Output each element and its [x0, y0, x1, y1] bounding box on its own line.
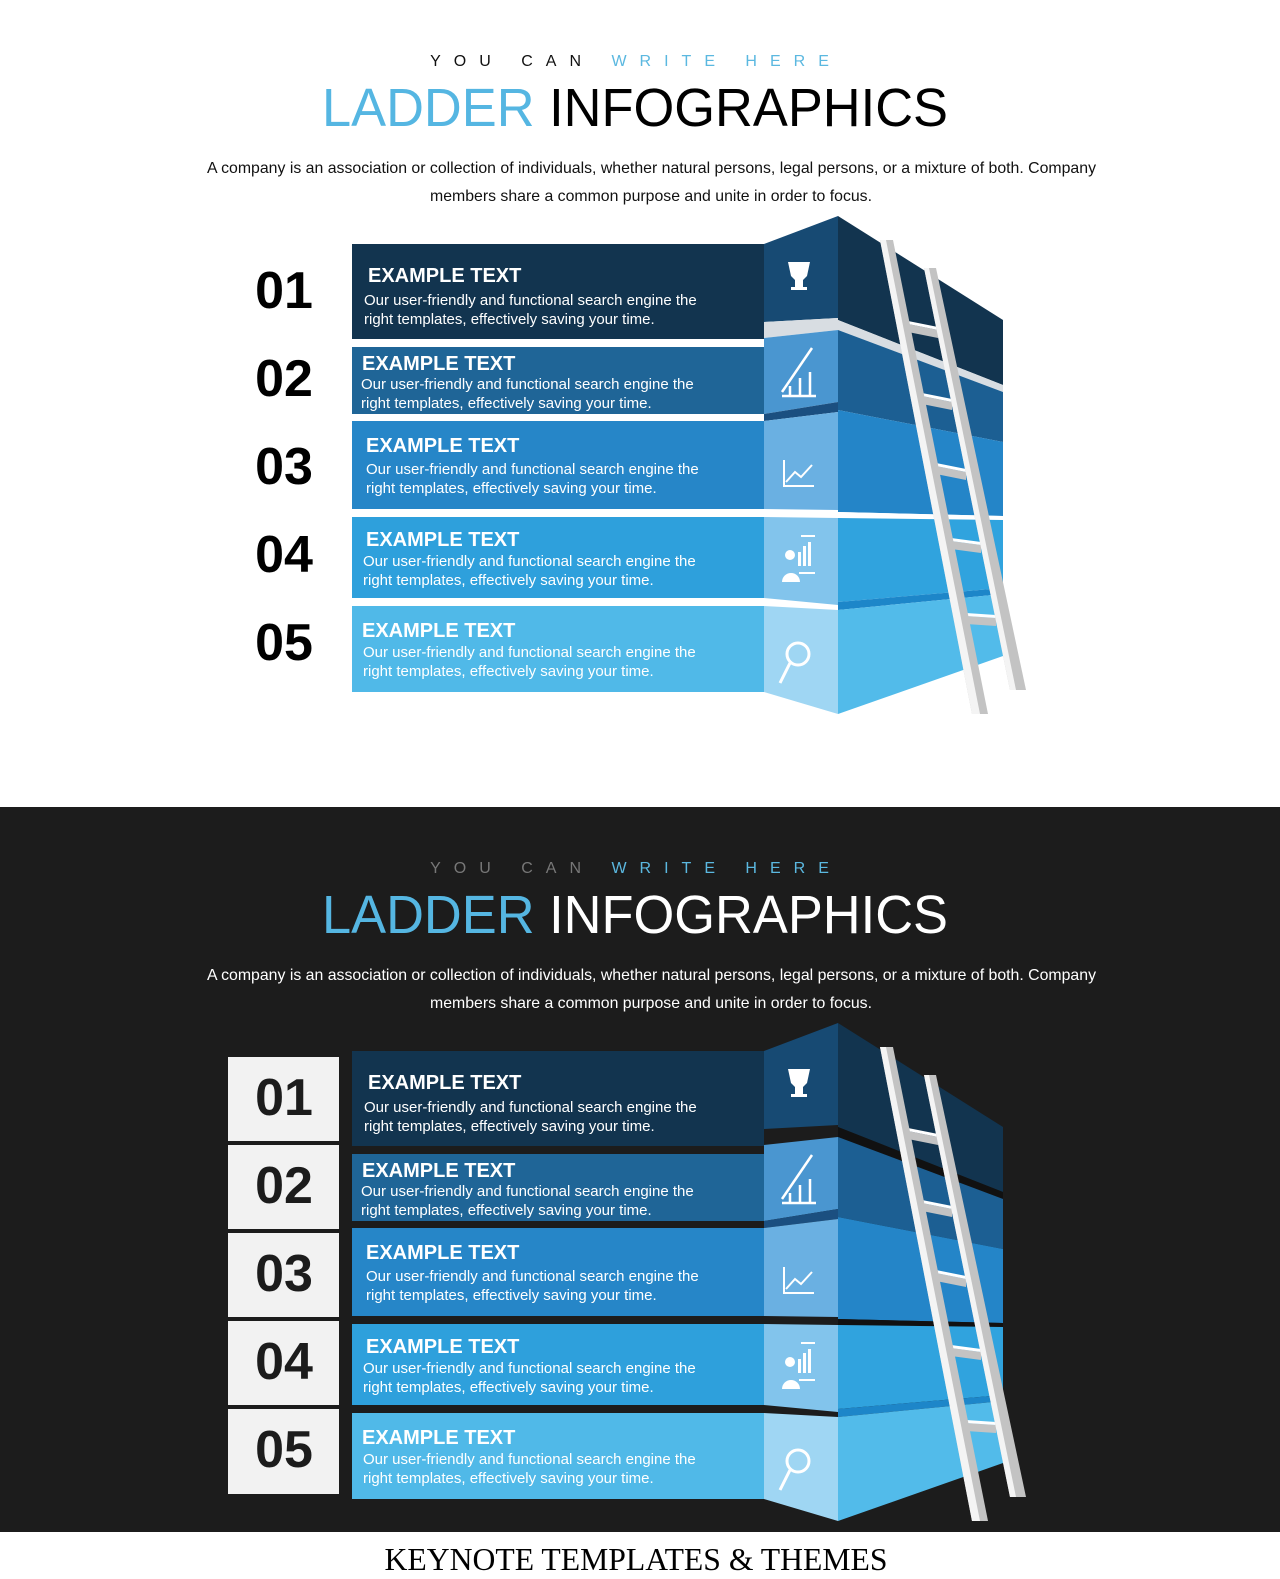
bars: Our user-friendly and functional search engine the — [363, 1360, 696, 1377]
footer: KEYNOTE TEMPLATES & THEMES — [384, 1541, 888, 1577]
subtitle: YOU CAN WRITE HERE — [430, 53, 842, 70]
bar 2: right templates, effectively saving your time. — [361, 395, 652, 412]
bar 4 — [352, 517, 764, 598]
numbers: 01 — [255, 262, 313, 320]
bars: right templates, effectively saving your time. — [361, 1202, 652, 1219]
bar 3: Our user-friendly and functional search engine the — [366, 461, 699, 478]
icons — [780, 1069, 816, 1490]
bar 1: EXAMPLE TEXT — [368, 265, 521, 287]
description: members share a common purpose and unite in order to focus. — [430, 188, 872, 205]
bars: EXAMPLE TEXT — [362, 1160, 515, 1182]
description: A company is an association or collection of individuals, whether natural persons, legal persons, or a mixture of both. Company — [207, 160, 1096, 177]
ladder — [880, 240, 1026, 714]
bar 2: Our user-friendly and functional search engine the — [361, 376, 694, 393]
bar 5: Our user-friendly and functional search engine the — [363, 644, 696, 661]
numbers — [255, 1069, 313, 1479]
ladder graphic: blocks — [764, 216, 1003, 714]
bar 5 — [352, 606, 764, 692]
bar 5: right templates, effectively saving your time. — [363, 663, 654, 680]
bar 4: right templates, effectively saving your time. — [363, 572, 654, 589]
numbers: 04 — [255, 1333, 313, 1391]
bars: Our user-friendly and functional search engine the — [363, 1451, 696, 1468]
numbers: 03 — [255, 438, 313, 496]
numbers: 02 — [255, 350, 313, 408]
title: LADDER INFOGRAPHICS — [322, 78, 948, 138]
icons — [780, 262, 816, 683]
bar 1: Our user-friendly and functional search engine the — [364, 292, 697, 309]
bar 5: EXAMPLE TEXT — [362, 620, 515, 642]
title: LADDER INFOGRAPHICS — [322, 885, 948, 945]
description — [207, 967, 1096, 1012]
panel: dark version — [0, 807, 1280, 1532]
numbers: 05 — [255, 1421, 313, 1479]
bar 3: EXAMPLE TEXT — [366, 435, 519, 457]
bar 4: EXAMPLE TEXT — [366, 529, 519, 551]
bars: EXAMPLE TEXT — [362, 1427, 515, 1449]
bars: EXAMPLE TEXT — [366, 1336, 519, 1358]
bars: EXAMPLE TEXT — [368, 1072, 521, 1094]
bars: right templates, effectively saving your time. — [363, 1470, 654, 1487]
numbers: 03 — [255, 1245, 313, 1303]
ladder — [880, 1047, 1026, 1521]
description — [207, 160, 1096, 205]
numbers — [255, 262, 313, 672]
dark ladder infographic — [228, 1023, 1026, 1521]
bar 2: EXAMPLE TEXT — [362, 353, 515, 375]
bars: right templates, effectively saving your time. — [363, 1379, 654, 1396]
bar 1: right templates, effectively saving your time. — [364, 311, 655, 328]
subtitle: YOU CAN WRITE HERE — [430, 860, 842, 877]
numbers: 05 — [255, 614, 313, 672]
bar 1 — [352, 244, 764, 339]
numbers: 02 — [255, 1157, 313, 1215]
bars: right templates, effectively saving your time. — [364, 1118, 655, 1135]
bars: EXAMPLE TEXT — [366, 1242, 519, 1264]
bar 4: Our user-friendly and functional search engine the — [363, 553, 696, 570]
bars: right templates, effectively saving your time. — [366, 1287, 657, 1304]
number boxes — [228, 1057, 339, 1494]
numbers: 01 — [255, 1069, 313, 1127]
description: members share a common purpose and unite in order to focus. — [430, 995, 872, 1012]
bar 2 — [352, 347, 764, 414]
bar 3 — [352, 421, 764, 509]
description: A company is an association or collection of individuals, whether natural persons, legal persons, or a mixture of both. Company — [207, 967, 1096, 984]
blocks — [764, 1023, 1003, 1521]
numbers: 04 — [255, 526, 313, 584]
bars — [352, 1051, 764, 1499]
panel: light version — [0, 0, 1280, 807]
bars: Our user-friendly and functional search engine the — [366, 1268, 699, 1285]
bar 3: right templates, effectively saving your time. — [366, 480, 657, 497]
bars: Our user-friendly and functional search engine the — [361, 1183, 694, 1200]
bars: Our user-friendly and functional search engine the — [364, 1099, 697, 1116]
